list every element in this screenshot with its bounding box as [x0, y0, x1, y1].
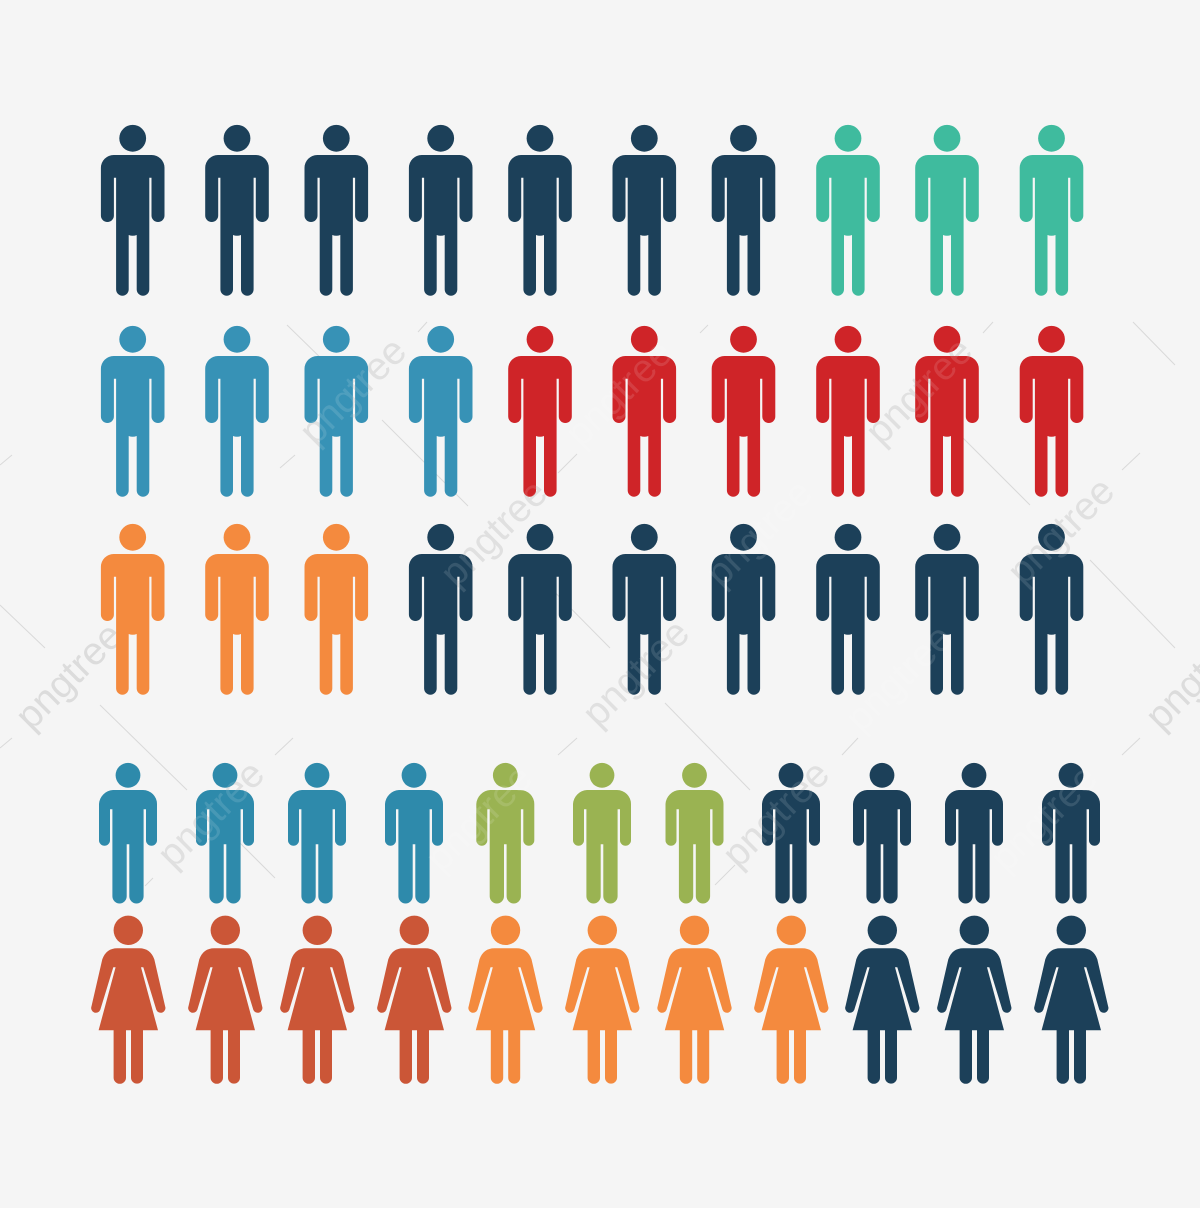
- watermark text: pngtree: [999, 469, 1123, 593]
- row 2: four blue and six red men: [101, 326, 1083, 497]
- watermark overlay on figures: pngtree: [837, 616, 961, 740]
- row 5: four rust, four orange and three navy women: [91, 916, 1108, 1084]
- watermark overlay on figures: pngtree: [574, 611, 698, 735]
- watermark overlay on figures: pngtree: [714, 752, 838, 876]
- watermark text: pngtree: [149, 752, 273, 876]
- watermark overlay on figures: pngtree: [857, 329, 981, 453]
- watermark overlay on figures: [149, 329, 1123, 880]
- watermark text: pngtree: [432, 471, 556, 595]
- watermark overlay on figures: pngtree: [149, 752, 273, 876]
- watermark overlay on figures: pngtree: [697, 471, 821, 595]
- watermark overlay on figures: pngtree: [417, 756, 541, 880]
- row 1: seven navy and three teal men: [101, 125, 1083, 296]
- watermark text: pngtree: [714, 752, 838, 876]
- watermark text: pngtree: [857, 329, 981, 453]
- watermark overlay on figures: pngtree: [999, 469, 1123, 593]
- watermark text: pngtree: [7, 614, 131, 738]
- watermark overlay on figures: pngtree: [291, 329, 415, 453]
- watermark lines: [0, 322, 1175, 886]
- row 4: four blue, three green and four navy men: [99, 763, 1100, 903]
- watermark text: pngtree: [291, 329, 415, 453]
- watermark text: pngtree: [574, 611, 698, 735]
- row 3: three orange and seven navy men: [101, 524, 1083, 695]
- watermark overlay on figures: pngtree: [432, 471, 556, 595]
- watermark overlay on figures: pngtree: [982, 756, 1106, 880]
- watermark text: [7, 329, 1200, 876]
- watermark overlay on figures: pngtree: [557, 331, 681, 455]
